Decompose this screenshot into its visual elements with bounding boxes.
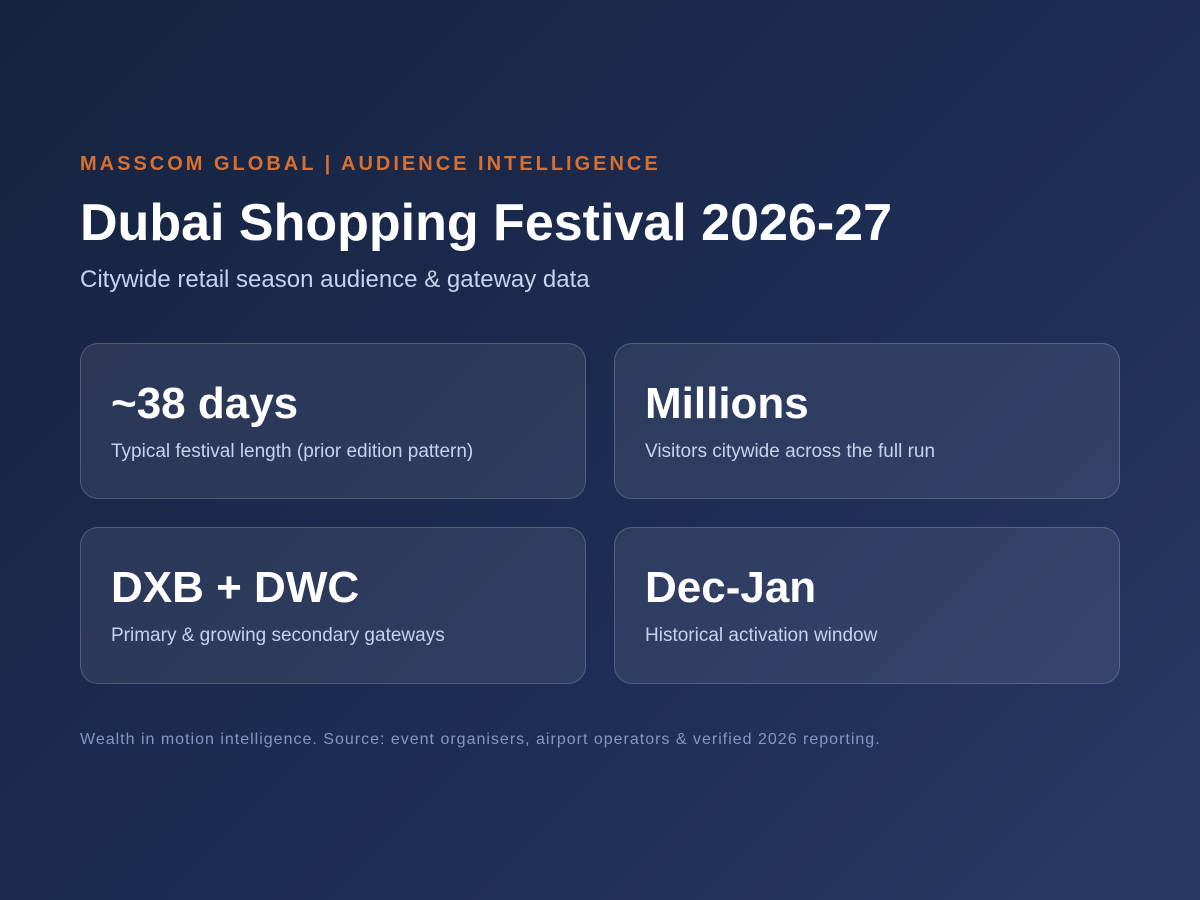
footer source note: Wealth in motion intelligence. Source: event organisers, airport operators & verified 2026 reporting. bbox=[80, 731, 881, 748]
panel: visitors bbox=[614, 343, 1120, 499]
subtitle: Citywide retail season audience & gateway data bbox=[80, 266, 590, 293]
stat value: Dec-Jan bbox=[645, 563, 816, 612]
panel: activation window bbox=[614, 527, 1120, 684]
panel: gateways bbox=[80, 527, 586, 684]
stat label: Primary & growing secondary gateways bbox=[111, 625, 445, 646]
panel: festival length bbox=[80, 343, 586, 499]
stat label: Visitors citywide across the full run bbox=[645, 441, 935, 462]
stat label: Typical festival length (prior edition pattern) bbox=[111, 441, 473, 462]
stat value: Millions bbox=[645, 379, 809, 428]
stat value: ~38 days bbox=[111, 379, 298, 428]
eyebrow heading: MASSCOM GLOBAL | AUDIENCE INTELLIGENCE bbox=[80, 153, 661, 175]
title: Dubai Shopping Festival 2026-27 bbox=[80, 194, 892, 252]
stat label: Historical activation window bbox=[645, 625, 877, 646]
stat value: DXB + DWC bbox=[111, 563, 359, 612]
